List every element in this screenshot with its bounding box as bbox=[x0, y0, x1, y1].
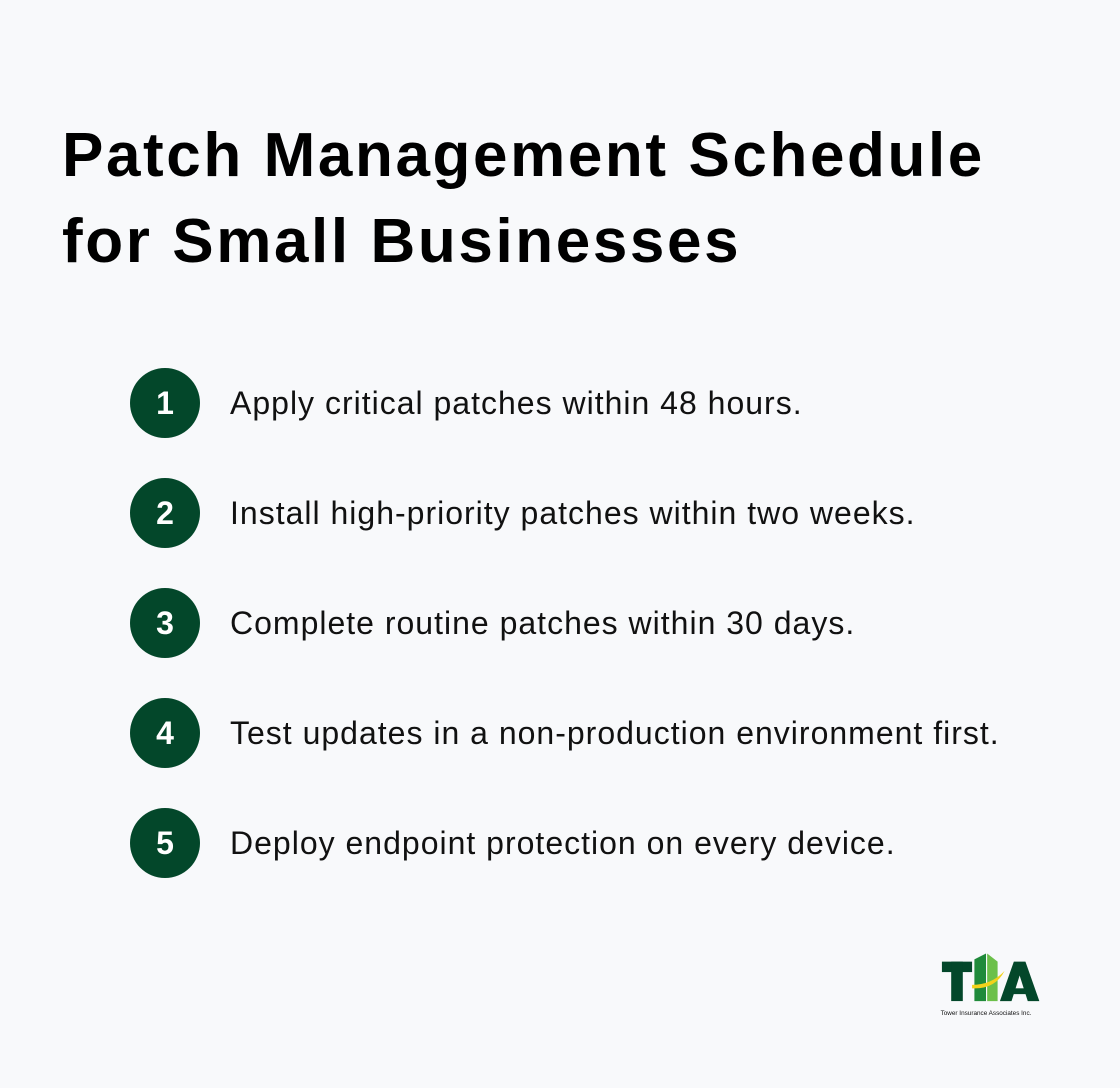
logo: Tower Insurance Associates Inc. bbox=[941, 1010, 1032, 1017]
item 3 bbox=[130, 588, 855, 658]
title bbox=[62, 121, 985, 276]
item 5 bbox=[130, 808, 896, 878]
item 5: 5 bbox=[156, 825, 174, 861]
item 4 bbox=[130, 698, 1000, 768]
logo bbox=[940, 954, 1040, 1017]
title: Patch Management Schedule bbox=[62, 121, 985, 190]
item 2: 2 bbox=[156, 495, 174, 531]
item 5: Deploy endpoint protection on every device. bbox=[230, 825, 896, 861]
item 2: Install high-priority patches within two weeks. bbox=[230, 495, 916, 531]
item 3: Complete routine patches within 30 days. bbox=[230, 605, 855, 641]
title: for Small Businesses bbox=[62, 207, 741, 276]
item 1: Apply critical patches within 48 hours. bbox=[230, 385, 803, 421]
item 2 bbox=[130, 478, 916, 548]
item 1 bbox=[130, 368, 803, 438]
item 1: 1 bbox=[156, 385, 174, 421]
item 4: Test updates in a non-production environment first. bbox=[230, 715, 1000, 751]
item 3: 3 bbox=[156, 605, 174, 641]
item 4: 4 bbox=[156, 715, 174, 751]
